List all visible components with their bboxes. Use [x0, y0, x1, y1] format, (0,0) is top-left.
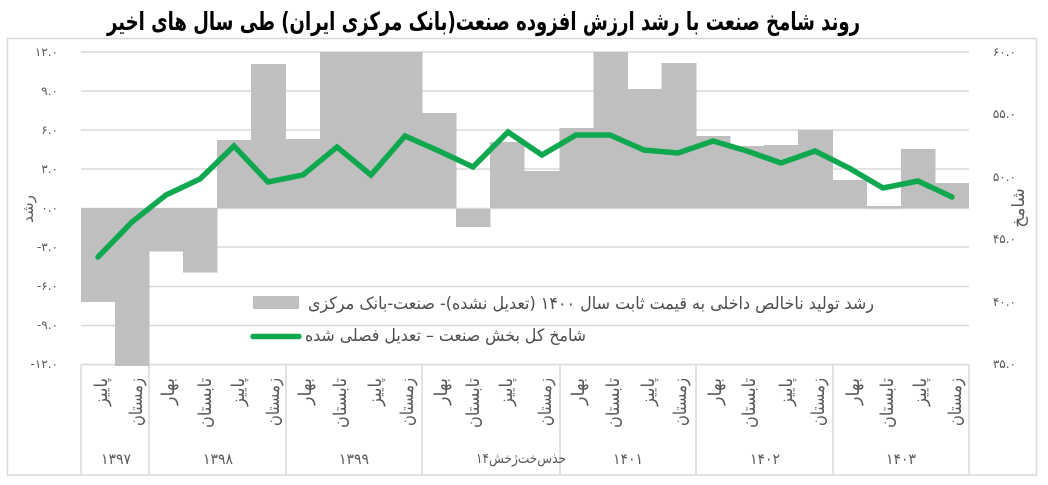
- bar series: industry GDP growth: [81, 52, 969, 366]
- left axis labels: ۹.۰: [41, 84, 58, 98]
- left axis labels: -۹.۰: [37, 318, 58, 332]
- season labels: تابستان: [739, 378, 760, 428]
- season labels: زمستان: [263, 378, 284, 426]
- season labels: بهار: [568, 378, 589, 406]
- year labels: ۱۳۹۸: [203, 450, 233, 468]
- year labels: [101, 450, 916, 468]
- right axis labels: [993, 45, 1016, 371]
- season labels: بهار: [431, 378, 452, 406]
- season labels: پاییز: [910, 378, 931, 407]
- right axis labels: ۶۰.۰: [993, 45, 1016, 59]
- right axis labels: ۴۵.۰: [993, 232, 1016, 246]
- legend: bars: رشد تولید ناخالص داخلی به قیمت ثابت سال ۱۴۰۰ (تعدیل نشده)- صنعت-بانک مرکزی: [308, 294, 874, 314]
- year labels: حذس‌خت‌ژخش۱۴: [476, 451, 566, 467]
- season labels: پاییز: [365, 378, 386, 407]
- line series: PMI industry: [98, 132, 952, 257]
- season labels: پاییز: [776, 378, 797, 407]
- season labels: پاییز: [496, 378, 517, 407]
- season labels: تابستان: [877, 378, 898, 428]
- season labels: پاییز: [228, 378, 249, 407]
- season labels: بهار: [158, 378, 179, 406]
- season labels: زمستان: [535, 378, 556, 426]
- season labels: زمستان: [126, 378, 147, 426]
- season labels: بهار: [705, 378, 726, 406]
- season labels: زمستان: [945, 378, 966, 426]
- legend: line: شامخ کل بخش صنعت – تعدیل فصلی شده: [305, 326, 586, 346]
- year labels: ۱۳۹۷: [101, 450, 131, 468]
- left axis labels: ۰.۰: [41, 201, 58, 215]
- right axis labels: ۵۰.۰: [993, 170, 1016, 184]
- left axis labels: -۳.۰: [37, 240, 58, 254]
- right axis labels: ۳۵.۰: [993, 357, 1016, 371]
- left axis labels: ۱۲.۰: [35, 45, 58, 59]
- season labels: تابستان: [195, 378, 216, 428]
- season labels: زمستان: [670, 378, 691, 426]
- season labels: پاییز: [638, 378, 659, 407]
- left axis title: رشد: [19, 195, 37, 223]
- left axis labels: [31, 45, 58, 371]
- left axis labels: -۱۲.۰: [31, 357, 58, 371]
- season labels: تابستان: [463, 378, 484, 428]
- season labels: [91, 378, 966, 428]
- left axis labels: -۶.۰: [37, 279, 58, 293]
- year labels: ۱۳۹۹: [339, 450, 369, 468]
- season labels: بهار: [843, 378, 864, 406]
- right axis title: شامخ: [1009, 188, 1029, 228]
- year labels: ۱۴۰۱: [613, 450, 643, 468]
- year labels: ۱۴۰۳: [886, 450, 916, 468]
- season labels: بهار: [295, 378, 316, 406]
- season labels: زمستان: [397, 378, 418, 426]
- season labels: تابستان: [603, 378, 624, 428]
- season labels: زمستان: [808, 378, 829, 426]
- right axis labels: ۵۵.۰: [993, 107, 1016, 121]
- left axis labels: ۳.۰: [41, 162, 58, 176]
- right axis labels: ۴۰.۰: [993, 295, 1016, 309]
- left axis labels: ۶.۰: [41, 123, 58, 137]
- season labels: تابستان: [330, 378, 351, 428]
- season labels: پاییز: [91, 378, 112, 407]
- year labels: ۱۴۰۲: [750, 450, 780, 468]
